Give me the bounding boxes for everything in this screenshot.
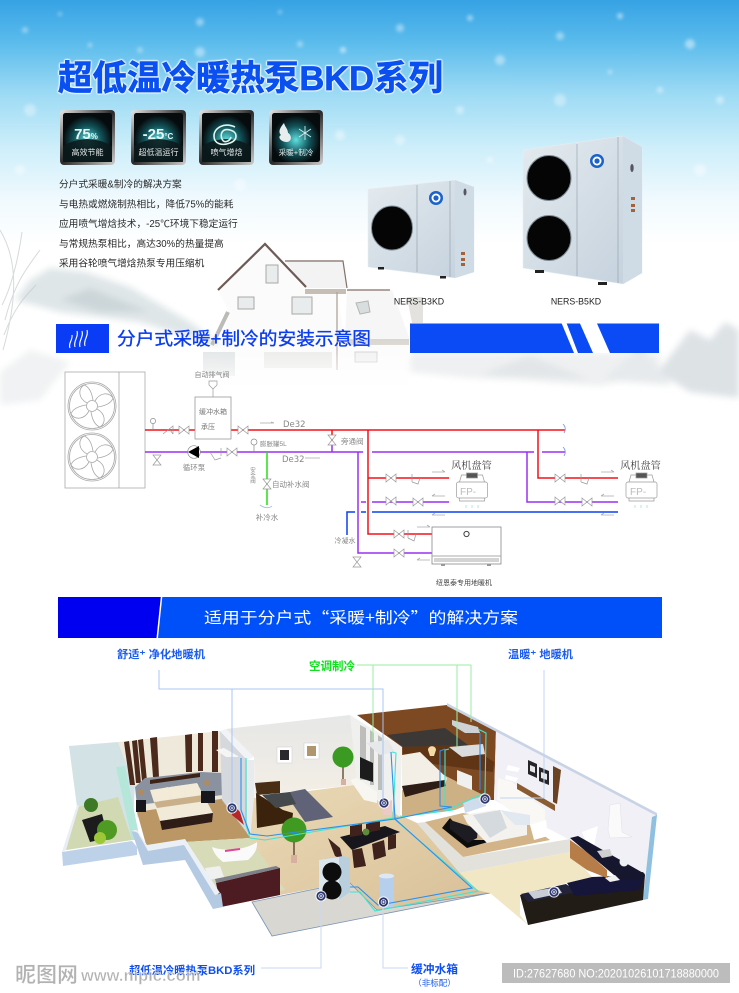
badge: -25C operation: 超低温运行 bbox=[138, 147, 178, 157]
installation schematic bbox=[65, 370, 661, 587]
label: air conditioning: 空调制冷 bbox=[309, 659, 355, 673]
schematic labels: De32 bbox=[282, 455, 305, 465]
flow arrows bbox=[260, 422, 614, 560]
feature badges bbox=[60, 110, 323, 165]
bathroom bbox=[185, 838, 285, 907]
schematic labels bbox=[183, 420, 364, 545]
upper bedroom bbox=[357, 705, 496, 817]
buffer tank: 自动排气阀 bbox=[194, 370, 230, 379]
right wall bbox=[447, 703, 657, 900]
schematic labels: 自动补水阀 bbox=[272, 479, 310, 489]
feature text block: 应用喷气增焓技术，-25℃环境下稳定运行 bbox=[59, 217, 238, 230]
product: NERS-B5KD unit bbox=[523, 136, 642, 285]
badge: -25C operation: -25°C bbox=[143, 126, 174, 143]
fan coil units: FP- bbox=[460, 487, 476, 498]
label: warm floor heater: 温暖⁺ 地暖机 bbox=[508, 647, 573, 661]
valves and fittings bbox=[150, 418, 592, 567]
buffer tank bbox=[194, 370, 231, 439]
main floor bbox=[250, 785, 490, 910]
snow flakes bbox=[15, 10, 724, 191]
badge: heating and cooling: 采暖+制冷 bbox=[279, 147, 314, 157]
schematic labels: 膨胀罐5L bbox=[260, 439, 287, 448]
label: floor heater: 纽恩泰专用地暖机 bbox=[436, 578, 492, 587]
badge: heating and cooling bbox=[269, 110, 323, 165]
feature text block bbox=[59, 178, 238, 270]
feature text block: 与电热或燃烧制热相比，降低75%的能耗 bbox=[59, 198, 234, 210]
connector nodes bbox=[226, 793, 560, 908]
dining set bbox=[328, 820, 400, 868]
schematic labels: 补冷水 bbox=[256, 512, 279, 522]
badge: vapor injection bbox=[199, 110, 254, 165]
heat pump outdoor unit bbox=[319, 856, 350, 900]
piping bbox=[145, 424, 618, 553]
partition wall with AC bbox=[216, 729, 255, 833]
fan coil units bbox=[456, 473, 657, 508]
badge: 75% energy saving bbox=[60, 110, 115, 165]
label: fan coil: 风机盘管 bbox=[451, 457, 492, 472]
terrace bbox=[252, 882, 490, 936]
feature text block: 分户式采暖&制冷的解决方案 bbox=[59, 178, 182, 190]
background: winter sky bbox=[0, 0, 739, 245]
watermark: www.nipic.com bbox=[80, 967, 200, 985]
section band: installation diagram bbox=[56, 324, 659, 353]
pipes bbox=[241, 729, 486, 911]
living room wall bbox=[226, 715, 357, 795]
TV wall and cabinet bbox=[350, 715, 402, 817]
label: comfort floor heater: 舒适⁺ 净化地暖机 bbox=[117, 647, 205, 661]
watermark bbox=[15, 964, 200, 987]
product: NERS-B3KD unit bbox=[368, 180, 474, 278]
heading: 适用于分户式“采暖+制冷”的解决方案 bbox=[204, 606, 519, 628]
exterior walls front bbox=[132, 830, 223, 909]
buffer tank: 缓冲水箱 bbox=[199, 407, 227, 416]
feature text block: 采用谷轮喷气增焓热泵专用压缩机 bbox=[59, 256, 205, 270]
circulation pump bbox=[188, 446, 200, 458]
leader line: warm heater bbox=[500, 670, 544, 798]
product label B5KD: NERS-B5KD bbox=[551, 296, 601, 306]
leader line: heat pump bbox=[261, 901, 321, 968]
feature text block: 与常规热泵相比，高达30%的热量提高 bbox=[59, 237, 224, 250]
section band: solutions bbox=[58, 597, 662, 638]
lower bedroom bbox=[417, 778, 570, 873]
bedroom A bbox=[118, 731, 250, 848]
badge: -25C operation bbox=[131, 110, 186, 165]
leader line: buffer tank bbox=[383, 908, 408, 968]
background: snowy hills and trees bbox=[0, 230, 739, 405]
buffer water tank bbox=[379, 874, 394, 907]
label: buffer tank: 缓冲水箱 bbox=[411, 962, 458, 976]
title: 超低温冷暖热泵BKD系列 bbox=[58, 60, 443, 98]
icon: heat waves bbox=[56, 324, 109, 353]
living room furniture bbox=[255, 746, 354, 863]
schematic labels: De32 bbox=[283, 420, 306, 430]
label: non standard: （非标配） bbox=[413, 978, 456, 988]
badge: 75% energy saving: 高效节能 bbox=[72, 147, 104, 157]
badge: vapor injection: 喷气增焓 bbox=[210, 147, 242, 157]
label: fan coil bbox=[451, 457, 661, 472]
schematic labels: 冷凝水 bbox=[334, 536, 356, 545]
schematic labels: 循环泵 bbox=[183, 462, 206, 472]
fan coil units: FP- bbox=[630, 487, 646, 498]
floor plan: isometric house bbox=[62, 703, 657, 936]
kitchen bbox=[460, 836, 645, 925]
watermark: 昵图网 bbox=[15, 964, 78, 987]
outdoor unit bbox=[65, 372, 145, 488]
house illustration bbox=[203, 242, 423, 376]
label: fan coil: 风机盘管 bbox=[620, 457, 661, 472]
schematic labels: 旁通阀 bbox=[341, 436, 364, 446]
schematic labels: 安全阀 bbox=[249, 466, 256, 485]
image id box bbox=[502, 963, 730, 983]
balcony bbox=[62, 742, 140, 866]
right bar with slashes bbox=[410, 324, 659, 353]
badge: 75% energy saving: 75% bbox=[74, 126, 98, 143]
leader lines: air conditioning bbox=[357, 665, 471, 747]
label: heat pump series: 超低温冷暖热泵BKD系列 bbox=[129, 963, 255, 977]
floor heating unit bbox=[432, 527, 501, 566]
leader lines: floor heating bbox=[159, 670, 383, 803]
heading: 分户式采暖+制冷的安装示意图 bbox=[117, 329, 371, 349]
product label B3KD: NERS-B3KD bbox=[394, 296, 444, 306]
buffer tank: 承压 bbox=[201, 422, 215, 431]
image id box: ID:27627680 NO:20201026101718880000 bbox=[513, 968, 719, 980]
